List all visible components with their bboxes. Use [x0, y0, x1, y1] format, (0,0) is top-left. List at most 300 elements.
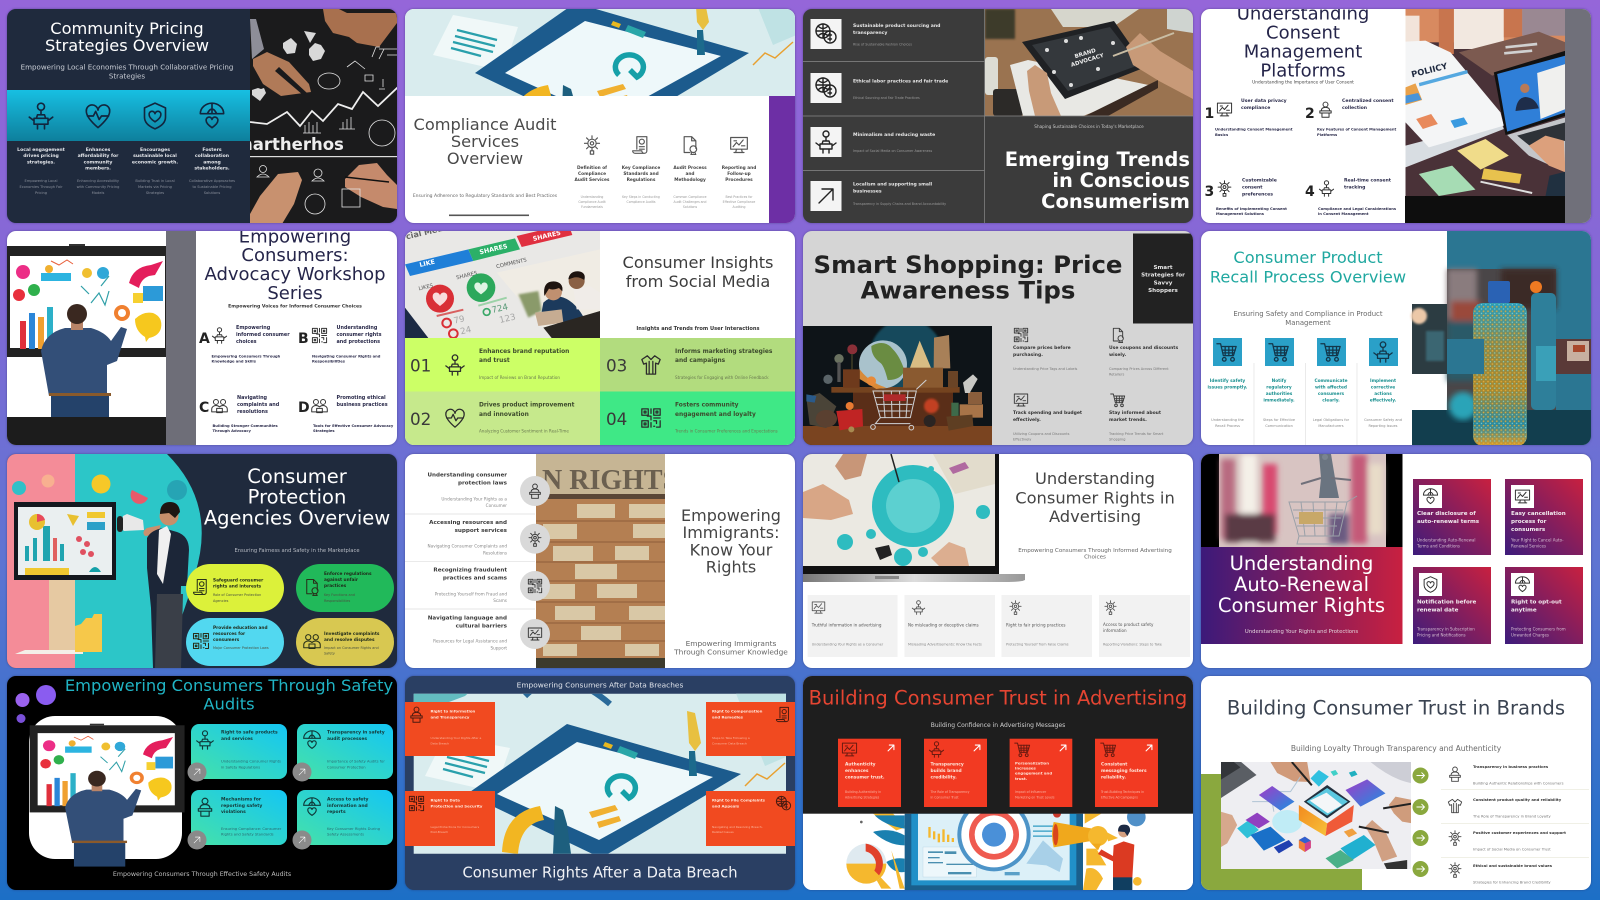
supporting notes: Best Practices for: [725, 194, 753, 198]
supporting notes: Legal Protections for Consumers: [430, 825, 480, 829]
subtitle: Empowering Immigrants: [686, 638, 777, 648]
icon band: [7, 90, 250, 140]
photo: laptop with teal diagram: [802, 454, 1024, 582]
key points: Right to fair pricing practices: [1006, 622, 1065, 627]
supporting notes: Key Steps in Conducting: [622, 194, 660, 198]
grid cells: [405, 338, 795, 445]
subtitle: Ensuring Safety and Compliance in Product: [1233, 310, 1382, 318]
slide: Empowering Consumers Through Safety Audits: [7, 676, 397, 890]
key points: Easy cancellation: [1510, 510, 1565, 516]
title: Agencies Overview: [204, 506, 390, 529]
footer: Empowering Consumers Through Effective Safety Audits: [113, 871, 291, 878]
title: Understanding: [1035, 468, 1154, 488]
title: [1015, 468, 1174, 526]
supporting notes: Through Advocacy: [212, 429, 251, 433]
photo: policy paper and laptop: POLIICY: [1410, 60, 1449, 79]
supporting notes: [811, 642, 1161, 646]
supporting notes: Empowering Local: [25, 178, 57, 182]
key points: Communicate: [1314, 378, 1347, 384]
step numbers: 4: [1304, 184, 1314, 200]
supporting notes: Your Right to Cancel Auto-: [1510, 537, 1564, 542]
supporting notes: Strategies: [313, 429, 335, 433]
supporting notes: Building Authenticity in: [844, 790, 881, 794]
supporting notes: Compliance Audits: [627, 200, 656, 204]
slide: Compliance Audit Services Overview: [405, 8, 795, 222]
subtitle: Building Confidence in Advertising Messages: [930, 722, 1065, 729]
key points: actions: [1374, 391, 1392, 397]
key points: Procedures: [725, 176, 753, 182]
key points: rights and interests: [213, 583, 262, 589]
supporting notes: in Consent Management: [1318, 212, 1368, 216]
key points: and Transparency: [430, 714, 470, 719]
illustration: presenter at whiteboard: [7, 244, 166, 445]
supporting notes: Utilizing Coupons and Discounts: [1012, 432, 1069, 436]
icon tiles: [810, 18, 841, 210]
key points: and Appeals: [712, 804, 740, 808]
key points: market trends.: [1108, 417, 1147, 423]
supporting notes: Pricing: [35, 190, 47, 194]
illustration: presenter in white frame: [29, 716, 185, 867]
cards: [807, 594, 1190, 656]
supporting notes: Strategies: [146, 190, 164, 194]
supporting notes: [1211, 418, 1401, 428]
supporting notes: [1214, 127, 1396, 216]
supporting notes: Recall Process: [1215, 424, 1240, 428]
tagline box: Shoppers: [1148, 288, 1178, 294]
key points: User data privacy: [1240, 98, 1286, 104]
key points: Fosters: [202, 146, 222, 152]
title: Consumer Product: [1233, 248, 1382, 267]
supporting notes: Building Authentic Relationships with Consumers: [1472, 781, 1563, 785]
key points: process for: [1510, 518, 1546, 524]
slide: Understanding Consumer Rights in Advertising: [802, 454, 1192, 668]
key points: [213, 570, 380, 642]
title: [204, 464, 390, 529]
illustration: man with megaphone and chart board: [7, 454, 202, 668]
supporting notes: Management Solutions: [1216, 212, 1264, 216]
supporting notes: Post-Breach: [430, 830, 448, 834]
key points: No misleading or deceptive claims: [908, 622, 978, 627]
tagline box: Strategies for: [1141, 273, 1185, 279]
photo: glowing bottle on teal panel: [1410, 231, 1590, 446]
key points: collaboration: [195, 152, 229, 158]
key points: Right to opt-out: [1510, 599, 1561, 605]
supporting notes: Consumer Protection: [327, 765, 366, 769]
photo: tablet with brand advocacy: [984, 8, 1192, 116]
key points: Use coupons and discounts: [1108, 345, 1178, 351]
title: Consumer: [247, 464, 348, 488]
photo: social media screen: 724: [491, 302, 510, 316]
key points: Audit Process: [673, 164, 707, 170]
supporting notes: Reporting Violations: Steps to Take: [1102, 642, 1161, 646]
olive accent block: [1200, 774, 1362, 890]
arrow buttons: [1412, 768, 1428, 877]
supporting notes: [19, 178, 235, 194]
supporting notes: Tracking Price Trends for Smart: [1108, 432, 1163, 436]
supporting notes: Protecting Yourself from False Claims: [1006, 642, 1068, 646]
supporting notes: Key Consumer Rights During: [327, 827, 380, 831]
key points: among: [203, 160, 221, 165]
supporting notes: [1416, 537, 1565, 637]
supporting notes: Navigating and Resolving Breach-: [712, 825, 763, 829]
illustration: target and megaphone: [803, 814, 1193, 890]
key points: [852, 22, 948, 194]
key points: businesses: [852, 188, 881, 194]
key points: effectively.: [1369, 398, 1396, 404]
supporting notes: [430, 736, 763, 834]
numbers: 04: [606, 409, 627, 429]
numbers: 03: [606, 356, 627, 376]
supporting notes: Understanding Auto-Renewal: [1416, 537, 1475, 542]
key points: consumers: [213, 636, 240, 642]
key points: information: [1102, 628, 1127, 632]
supporting notes: [852, 42, 946, 205]
photo: shopping still life: [803, 326, 992, 445]
photo: hands drawing on chalkboard: nartherhos: [241, 134, 344, 154]
supporting notes: Impact of Influencer: [1014, 790, 1046, 794]
supporting notes: Key Features of Consent Management: [1316, 127, 1396, 131]
key points: builds brand: [930, 768, 961, 774]
key points: clearly.: [1322, 398, 1340, 404]
key points: Clear disclosure of: [1416, 510, 1476, 516]
supporting notes: Impact of Social Media on Consumer Awareness: [852, 148, 932, 152]
key points: with affected: [1315, 384, 1346, 390]
supporting notes: Communication: [1265, 424, 1292, 428]
key points: engagement and: [1014, 771, 1052, 776]
title panel: Auto-Renewal: [1233, 572, 1369, 596]
photo: brick wall with rights engraving: [536, 454, 678, 668]
key points: Minimalism and reducing waste: [852, 132, 935, 138]
subtitle: Empowering Local Economies Through Collaborative Pricing: [21, 62, 233, 71]
photo: social media screen: SHARES: [456, 270, 479, 281]
supporting notes: Tools for Effective Consumer Advocacy: [313, 424, 394, 428]
subtitle: Understanding the Importance of User Consent: [1252, 79, 1354, 85]
icons: [446, 355, 660, 427]
supporting notes: Rights and Safety Standards: [221, 832, 274, 836]
supporting notes: Solutions: [204, 190, 220, 194]
key points: Informs marketing strategies: [675, 349, 773, 355]
supporting notes: Renewal Services: [1510, 543, 1546, 548]
numbers: 01: [410, 356, 431, 376]
supporting notes: Understanding Consumer Rights: [221, 760, 281, 764]
supporting notes: Importance of Safety Audits for: [327, 760, 385, 764]
key points: and trust: [479, 358, 510, 364]
grey side bar: [166, 231, 196, 445]
illustration: data tablet and padlock: [414, 694, 786, 854]
key points: Stay informed about: [1108, 410, 1161, 416]
supporting notes: Impact of Reviews on Brand Reputation: [479, 375, 560, 380]
supporting notes: to Sustainable Pricing: [192, 184, 232, 188]
arrows: [888, 745, 1151, 751]
key points: Notify: [1271, 378, 1286, 384]
key points: resolutions: [237, 409, 268, 415]
key points: members.: [85, 165, 111, 171]
black base strip: [1404, 196, 1564, 222]
key points: stakeholders.: [194, 165, 230, 171]
supporting notes: Responsibilities: [324, 598, 350, 602]
key points: Enhances: [86, 146, 111, 152]
supporting notes: Navigating Consumer Complaints and: [428, 543, 507, 548]
title: [681, 506, 781, 576]
key points: [844, 760, 1146, 781]
icon tiles: [1212, 338, 1398, 366]
key points: Compare prices before: [1012, 345, 1070, 351]
key points: Methodology: [674, 176, 706, 182]
key points: [236, 325, 388, 415]
key points: violations: [221, 809, 246, 815]
title: Overview: [447, 148, 523, 168]
tagline box: Savvy: [1153, 280, 1172, 286]
key points: renewal date: [1416, 607, 1458, 613]
key points: Track spending and budget: [1012, 410, 1082, 416]
title: Know Your: [690, 540, 773, 559]
supporting notes: Steps for Effective: [1262, 418, 1295, 422]
key points: Right to safe products: [221, 730, 278, 736]
photo: social media screen: LIKES: [418, 283, 434, 292]
key points: [427, 472, 508, 629]
title: [414, 114, 556, 168]
key points: Empowering: [236, 325, 271, 331]
supporting notes: Navigating Consumer Rights and: [312, 355, 381, 359]
supporting notes: Terms and Conditions: [1416, 543, 1460, 548]
supporting notes: Legal Obligations for: [1312, 418, 1349, 422]
key points: Follow-up: [727, 170, 751, 176]
key points: Local engagement: [17, 146, 66, 152]
supporting notes: in Safety Regulations: [221, 765, 260, 769]
supporting notes: Ensuring Compliance: Consumer: [221, 827, 282, 831]
title: [1236, 3, 1369, 81]
subtitle: Strategies: [109, 71, 145, 80]
key points: Right to Information: [430, 709, 476, 714]
subtitle: Management: [1285, 319, 1330, 327]
key points: Mechanisms for: [221, 797, 262, 803]
step numbers: 1: [1204, 106, 1214, 122]
key points: reporting safety: [221, 803, 262, 809]
dividers: [405, 514, 535, 608]
title panel: Understanding Your Rights and Protections: [1244, 628, 1358, 634]
icons: [212, 328, 327, 413]
supporting notes: Effective Compliance: [723, 200, 755, 204]
purple side bar: [769, 96, 795, 222]
supporting notes: Empowering Consumers Through: [212, 355, 281, 359]
title: Services: [451, 132, 519, 150]
supporting notes: Role of Consumer Protection: [213, 592, 261, 596]
supporting notes: Transparency in Supply Chains and Brand Accountability: [852, 202, 946, 206]
key points: [810, 622, 1153, 632]
key points: enhances: [844, 768, 868, 774]
subtitle: Ensuring Adherence to Regulatory Standards and Best Practices: [413, 192, 558, 198]
supporting notes: Analyzing Customer Sentiment in Real-Time: [479, 429, 569, 434]
supporting notes: Understanding Consent Management: [1214, 127, 1292, 131]
key points: Recognizing fraudulent: [433, 567, 507, 573]
key points: Navigating: [237, 395, 268, 401]
key points: Accessing resources and: [429, 520, 507, 526]
photo: tablet with brand advocacy: BRAND: [1074, 47, 1097, 60]
key points: and innovation: [479, 412, 529, 418]
slide: Community Pricing Strategies Overview: [7, 8, 397, 222]
slide: Consumer Rights After a Data Breach: [405, 676, 795, 890]
supporting notes: Reporting Issues: [1368, 424, 1397, 428]
key points: Protection and Security: [430, 804, 483, 808]
key points: immediately.: [1263, 398, 1294, 404]
title: Empowering Consumers Through Safety: [65, 676, 394, 695]
supporting notes: Support: [490, 645, 507, 650]
subtitle: [21, 62, 233, 80]
step letters: C: [199, 400, 209, 416]
key points: tracking: [1344, 184, 1365, 190]
slide: Consumer Insights from Social Media: [405, 231, 795, 445]
slide: Building Consumer Trust in Brands: [1200, 676, 1590, 890]
key points: Definition of: [577, 164, 607, 170]
subtitle: Insights and Trends from User Interactions: [636, 326, 760, 332]
title: Audits: [203, 695, 255, 714]
key points: credibility.: [930, 774, 957, 780]
title: Awareness Tips: [860, 276, 1075, 304]
title: [1209, 248, 1406, 286]
key points: Drives product improvement: [479, 403, 575, 409]
key points: increases: [1014, 766, 1036, 771]
supporting notes: Trends in Consumer Preferences and Expectations: [674, 429, 778, 434]
photo: policy paper and laptop: [1406, 9, 1565, 196]
step letters: A: [199, 331, 210, 347]
key points: sustainable local: [133, 152, 177, 158]
supporting notes: Related Issues: [712, 830, 734, 834]
title: [204, 226, 386, 304]
supporting notes: with Community Pricing: [77, 184, 119, 188]
key points: practices: [324, 582, 347, 588]
subtitle: Ensuring Fairness and Safety in the Marketplace: [234, 548, 360, 554]
key points: information and: [327, 803, 368, 809]
supporting notes: Shopping: [1108, 438, 1125, 442]
key points: reliability.: [1100, 774, 1126, 780]
key points: Regulations: [627, 176, 656, 182]
key points: Navigating language and: [428, 615, 507, 621]
supporting notes: [1012, 367, 1169, 442]
key points: Promoting ethical: [336, 395, 386, 401]
dividers: [1254, 363, 1356, 445]
supporting notes: Basics: [1214, 132, 1228, 136]
key points: consent: [1242, 184, 1263, 190]
key points: choices: [236, 339, 257, 345]
title: Consumer Rights After a Data Breach: [462, 864, 738, 882]
cards: [191, 724, 393, 845]
key points: Implement: [1369, 378, 1396, 384]
key points: Provide education and: [213, 624, 268, 630]
supporting notes: Understanding Price Tags and Labels: [1012, 367, 1077, 371]
key points: support services: [455, 528, 508, 534]
key points: drives pricing: [23, 152, 59, 158]
key points: and resolve disputes: [324, 636, 375, 642]
title: Recall Process Overview: [1209, 268, 1406, 286]
photo: social media screen: 79: [453, 314, 466, 327]
supporting notes: Platforms: [1316, 132, 1338, 136]
supporting notes: Compliance Audit: [578, 200, 606, 204]
supporting notes: Scams: [493, 598, 507, 602]
key points: Investigate complaints: [324, 630, 380, 636]
photo: shopping cart with justice statue: [1200, 454, 1402, 546]
key points: Right to Compensation: [712, 709, 763, 714]
key points: trust.: [1014, 776, 1027, 781]
key points: Understanding consumer: [427, 472, 507, 478]
supporting notes: Consumer Data Breach: [712, 742, 747, 746]
subtitle: Building Loyalty Through Transparency and Authenticity: [1290, 744, 1501, 753]
key points: consumers: [1317, 391, 1344, 397]
key points: Reporting and: [722, 164, 756, 170]
supporting notes: Impact on Consumer Rights and: [324, 646, 379, 650]
key points: consumers: [1510, 526, 1545, 532]
title: [623, 253, 773, 291]
supporting notes: Understanding Your Rights After a: [430, 736, 481, 740]
supporting notes: Misleading Advertisements: Know the Facts: [908, 642, 981, 646]
step letters: D: [298, 400, 310, 416]
key points: Fosters community: [675, 403, 739, 409]
photo: tablet with brand advocacy: ADVOCACY: [1070, 52, 1105, 68]
key points: [479, 349, 773, 418]
supporting notes: Consumer: [486, 502, 507, 508]
title: Protection: [248, 485, 346, 508]
arrow buttons: [188, 762, 312, 850]
key points: issues promptly.: [1207, 384, 1247, 390]
key points: strategies.: [27, 159, 55, 165]
key points: audit processes: [327, 736, 367, 742]
key points: resources for: [213, 630, 246, 636]
title: Immigrants:: [682, 522, 780, 542]
key points: practices and scams: [443, 575, 508, 581]
slide: Understanding Consent Management Platforms: [1200, 8, 1590, 222]
title: in Conscious: [1052, 168, 1190, 192]
supporting notes: Safety: [324, 651, 335, 655]
supporting notes: Unwanted Charges: [1510, 632, 1548, 637]
slide: Building Consumer Trust in Advertising: [802, 676, 1192, 890]
title: Management: [1243, 41, 1362, 62]
supporting notes: Auditing: [733, 204, 745, 208]
icons: [194, 579, 320, 648]
key points: Positive customer experiences and support: [1472, 830, 1566, 835]
title: from Social Media: [626, 272, 770, 291]
key points: messaging fosters: [1100, 768, 1146, 774]
key points: consumer trust.: [844, 774, 884, 780]
slide: Empowering Immigrants: Know Your Rights: [405, 454, 795, 668]
key points: collection: [1342, 104, 1367, 110]
key points: Access to safety: [327, 797, 368, 803]
photo: social media screen: 123: [498, 312, 517, 326]
numbers: 02: [410, 409, 431, 429]
slide: Consumer Protection Agencies Overview: [7, 454, 397, 668]
key points: and: [685, 170, 695, 176]
supporting notes: Marketing on Trust Levels: [1014, 795, 1054, 799]
supporting notes: Enhancing Accessibility: [77, 178, 120, 182]
supporting notes: Collaborative Approaches: [189, 178, 235, 182]
key points: Access to product safety: [1102, 622, 1153, 626]
key points: Real-time consent: [1344, 177, 1391, 183]
supporting notes: Retailers: [1108, 373, 1124, 377]
supporting notes: Knowledge and Skills: [212, 360, 257, 364]
supporting notes: [578, 194, 755, 208]
supporting notes: Protecting Yourself from Fraud and: [435, 591, 507, 596]
photo: hands around isometric brand box: [1221, 762, 1411, 869]
key points: Safeguard consumer: [213, 577, 264, 583]
key points: Centralized consent: [1342, 98, 1394, 104]
photo: social media screen: LIKE: [419, 259, 436, 269]
red panels: [405, 702, 795, 846]
key points: informed consumer: [236, 332, 290, 338]
slide: Smart Shopping: Price Awareness Tips: [802, 231, 1192, 445]
icons: [1217, 102, 1333, 196]
subtitle: [1018, 548, 1172, 560]
key points: Encourages: [140, 146, 170, 152]
key points: purchasing.: [1012, 352, 1043, 358]
supporting notes: Rise of Sustainable Fashion Choices: [852, 42, 912, 46]
